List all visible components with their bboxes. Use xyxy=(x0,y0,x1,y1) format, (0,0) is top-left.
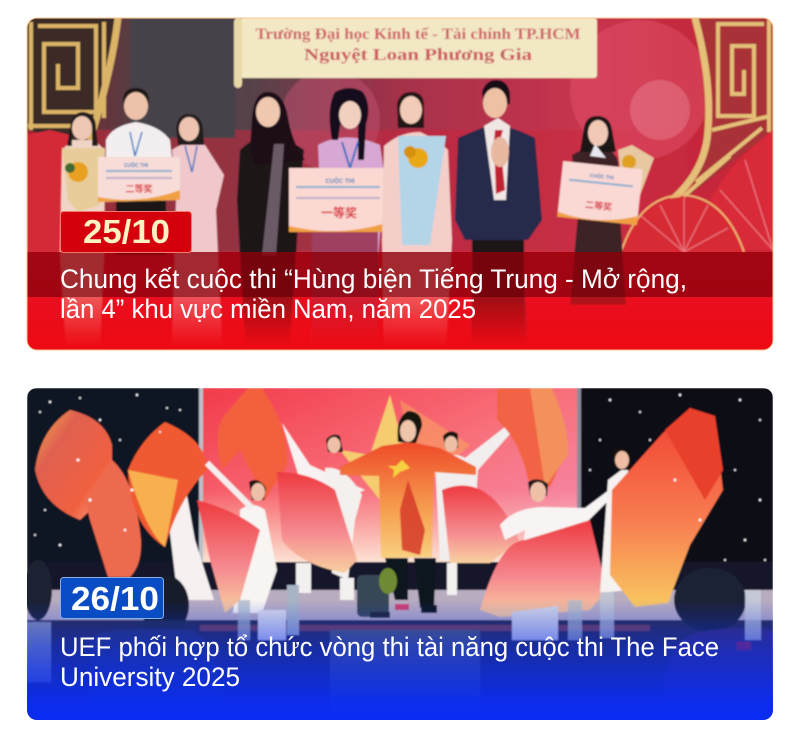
sign: first prize centre: 一等奖 xyxy=(321,204,357,221)
dancer: rear left centre with fan xyxy=(277,423,365,600)
heading: event 25/10 title xyxy=(60,264,687,324)
stage screen xyxy=(199,388,580,562)
sign: first prize centre xyxy=(289,168,389,232)
dancer: left rear white dress xyxy=(165,490,214,600)
stars on backdrop xyxy=(34,394,766,561)
audience: heads and tables xyxy=(27,560,773,682)
banner xyxy=(234,18,597,88)
person: winner in lilac hanfu xyxy=(310,88,385,345)
fan: screen upper left xyxy=(218,388,287,500)
sign: second prize left: 二等奖 xyxy=(125,182,153,195)
dancer: lower left with fan xyxy=(197,463,277,613)
badge: date 26/10: 26/10 xyxy=(71,580,159,617)
panel: event 26/10 xyxy=(24,388,773,720)
ornament: left gold meander xyxy=(27,18,118,145)
sign: first prize centre: CUỘC THI xyxy=(326,177,355,185)
banner: Trường Đại học Kinh tế - Tài chính TP.HCM xyxy=(256,26,581,43)
overlay: red gradient xyxy=(27,297,773,350)
heading: event 26/10 title xyxy=(60,632,719,692)
icon: fan left xyxy=(27,130,70,252)
photo: award ceremony on stage xyxy=(27,18,775,350)
sign: second prize left xyxy=(98,157,180,202)
person: woman in black xyxy=(237,92,305,345)
badge: date 25/10: 25/10 xyxy=(83,213,170,250)
panel outline: card 1 xyxy=(27,18,773,350)
heading: event 26/10 title: University 2025 xyxy=(60,662,240,692)
person: boy in white shirt xyxy=(106,88,172,255)
heading: event 25/10 title: lần 4” khu vực miền Nam, năm 2025 xyxy=(60,294,476,324)
overlay: blue gradient xyxy=(27,600,773,720)
icon: fan right xyxy=(621,128,775,252)
sign: second prize right xyxy=(557,161,643,225)
dancer: far right with large fan xyxy=(600,408,723,607)
person: girl in pale ao dai xyxy=(172,114,224,345)
person: man in navy suit xyxy=(455,80,542,345)
person: girl with flowers xyxy=(60,112,105,345)
person: girl with blue bouquet xyxy=(382,92,452,345)
badge: date 25/10 xyxy=(60,212,192,252)
sign: second prize right: CUỘC THI xyxy=(589,171,615,181)
panel: event 25/10 xyxy=(27,18,775,350)
heading: event 25/10 title: Chung kết cuộc thi “Hùng biện Tiếng Trung - Mở rộng, xyxy=(60,264,687,294)
banner: Nguyệt Loan Phương Gia xyxy=(304,45,533,64)
ornament: right gold meander xyxy=(672,18,773,205)
overlay: dark caption band xyxy=(27,252,773,297)
sign: second prize left: CUỘC THI xyxy=(124,161,149,169)
photo: fan dance performance xyxy=(24,388,773,720)
dancer: lower right with fan xyxy=(480,479,611,617)
person: girl with sign right xyxy=(570,116,654,305)
icon: stage spotlight xyxy=(357,568,397,618)
fan: second left xyxy=(128,422,207,547)
dancer: rear right centre with fan xyxy=(435,388,568,595)
fan: far left xyxy=(35,410,112,520)
dancer: centre in red flag ao dai xyxy=(340,411,476,613)
sign: second prize right: 二等奖 xyxy=(585,198,613,213)
stage floor xyxy=(27,562,773,592)
heading: event 26/10 title: UEF phối hợp tổ chức vòng thi tài năng cuộc thi The Face xyxy=(60,632,719,662)
